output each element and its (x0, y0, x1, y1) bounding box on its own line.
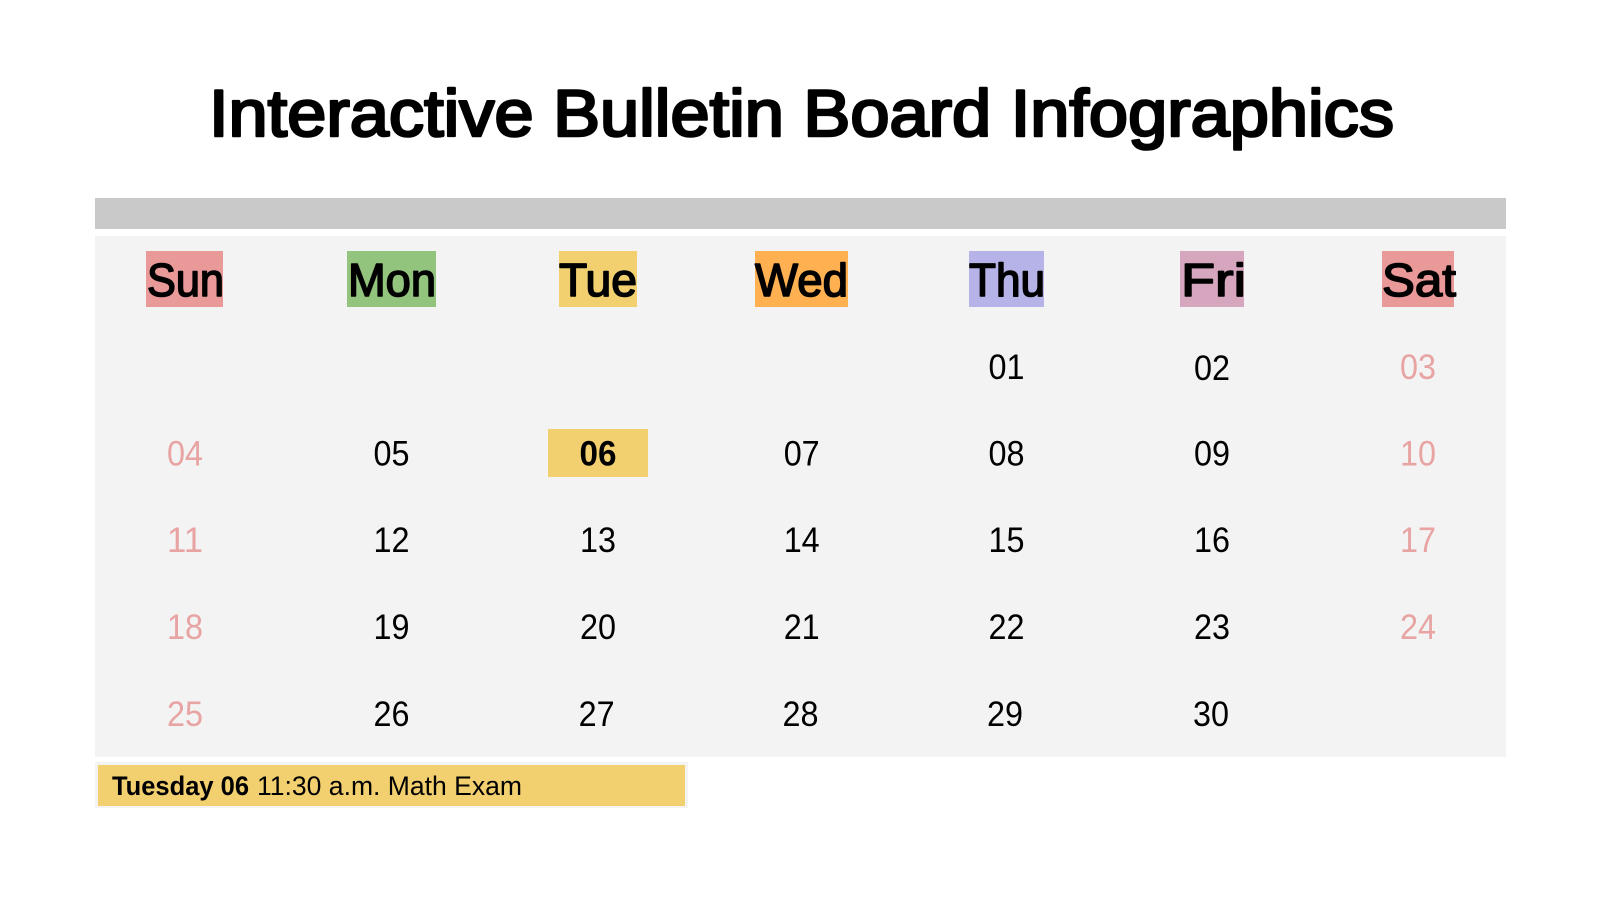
date numbers: 05 (374, 434, 410, 474)
date numbers: 21 (784, 607, 820, 647)
callout: event note: 11:30 a.m. Math Exam (257, 771, 522, 801)
date numbers: 02 (1194, 348, 1230, 388)
weekday: Thu: Thu (969, 254, 1045, 306)
date numbers: 03 (1400, 347, 1436, 387)
date numbers: 26 (374, 694, 410, 734)
date numbers: 24 (1400, 607, 1436, 647)
date numbers: 01 (988, 347, 1024, 387)
callout: event note (95, 762, 688, 808)
date numbers: 22 (988, 607, 1024, 647)
date numbers: 09 (1194, 434, 1230, 474)
weekday: Sat: Sat (1382, 254, 1456, 306)
weekday: Tue: Tue (559, 254, 637, 306)
date numbers: 20 (580, 607, 616, 647)
date numbers: 08 (988, 434, 1024, 474)
weekday: Fri: Fri (1181, 254, 1246, 306)
date numbers: 16 (1194, 520, 1230, 560)
title: Interactive Bulletin Board Infographics (209, 76, 1394, 150)
date numbers: 04 (167, 434, 203, 474)
callout: event note: Tuesday 06 (112, 771, 249, 801)
date numbers (167, 347, 1436, 734)
weekday headers (146, 251, 1456, 307)
date numbers: 28 (782, 694, 818, 734)
calendar month header bar (95, 198, 1506, 229)
date numbers: 30 (1193, 694, 1229, 734)
date numbers: 12 (374, 520, 410, 560)
weekday: Sun: Sun (147, 254, 224, 306)
weekday: Mon: Mon (348, 254, 436, 306)
date numbers: 25 (167, 694, 203, 734)
weekday: Wed: Wed (755, 254, 848, 306)
date numbers: 27 (579, 694, 615, 734)
date numbers: 14 (784, 520, 820, 560)
date numbers: 17 (1400, 520, 1436, 560)
date numbers: 18 (167, 607, 203, 647)
date numbers: 15 (988, 520, 1024, 560)
date numbers: 19 (374, 607, 410, 647)
date numbers: 10 (1400, 434, 1436, 474)
date numbers: 11 (167, 520, 203, 560)
date numbers: 06 (580, 434, 616, 474)
highlight: selected date 06 (548, 429, 648, 477)
date numbers: 29 (987, 694, 1023, 734)
date numbers: 23 (1194, 607, 1230, 647)
panel: calendar (95, 236, 1506, 757)
date numbers: 13 (580, 520, 616, 560)
date numbers: 07 (784, 434, 820, 474)
